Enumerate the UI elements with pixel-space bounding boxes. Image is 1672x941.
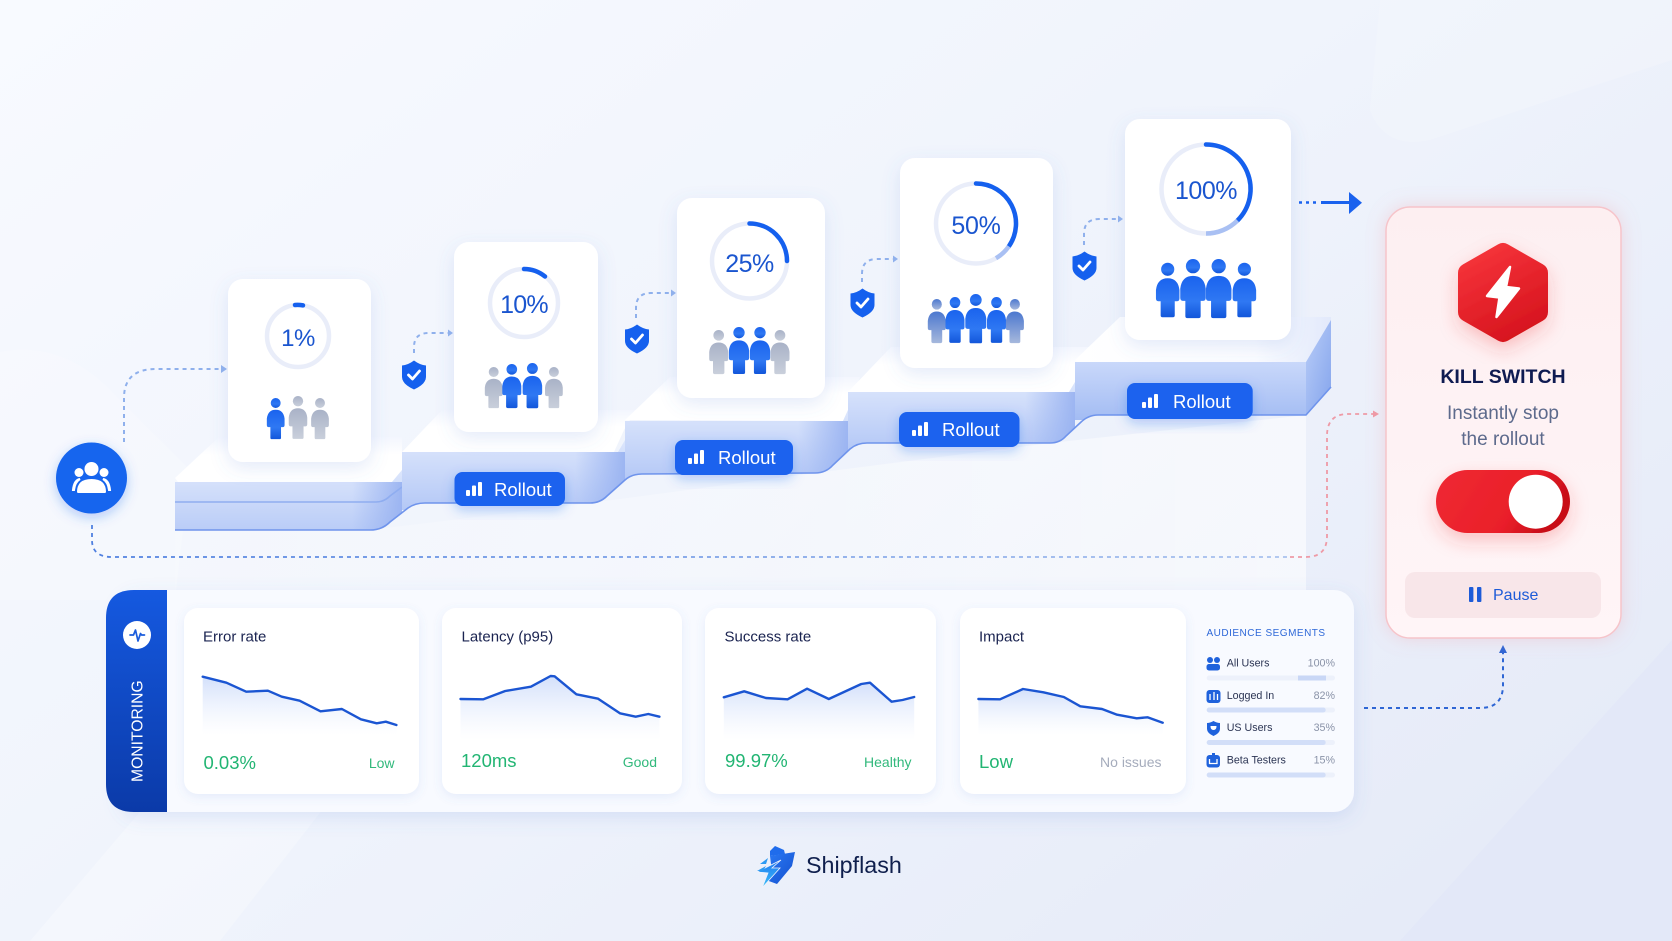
card: 25% (677, 198, 825, 398)
progress ring 100% (1162, 144, 1251, 234)
people: 4 of 4 (1156, 259, 1256, 318)
shield check 4 with connector (1072, 216, 1123, 280)
arrow: audience feedback to kill switch (92, 410, 1379, 557)
metric card: error rate: Error rate (203, 628, 266, 646)
badge: rollout 2: Rollout (494, 479, 552, 500)
arrow: audience to 1% card (124, 369, 222, 442)
staircase platforms (175, 317, 1331, 540)
segment: us users: US Users (1227, 722, 1272, 734)
progress ring 25%: 25% (725, 250, 774, 278)
staircase bottom edge (175, 387, 1331, 530)
card: 50% (900, 158, 1053, 368)
badge: rollout 5: Rollout (1173, 391, 1231, 412)
sparkline: success rate (724, 683, 914, 740)
description: the rollout (1461, 429, 1545, 450)
badge: rollout 4 (899, 412, 1020, 447)
metric card: error rate: 0.03% (204, 752, 256, 773)
sidebar: monitoring: MONITORING (130, 680, 146, 782)
badge: rollout 3 (675, 440, 793, 475)
segment: all users: 100% (1308, 658, 1335, 670)
badge: rollout 4: Rollout (942, 419, 1000, 440)
progress ring 10% (490, 269, 558, 337)
wordmark: Shipflash (806, 852, 902, 878)
arrow: monitoring to kill switch (1364, 645, 1507, 708)
people: 3 of 5 highlighted (928, 294, 1024, 343)
metric card: impact (960, 608, 1186, 794)
people: 1 of 3 (267, 396, 329, 439)
step 1 platform (175, 448, 402, 530)
metric card: latency: Latency (p95) (462, 628, 553, 646)
logo mark (757, 846, 795, 888)
sparkline: latency (460, 676, 659, 740)
segment: logged in: Logged In (1227, 690, 1274, 702)
metric card: impact: Impact (979, 628, 1025, 646)
description: Instantly stop (1447, 403, 1559, 424)
step 2 platform (402, 418, 630, 510)
badge: rollout 2 (454, 472, 565, 506)
progress ring 100%: 100% (1175, 177, 1237, 205)
card: 10% (454, 242, 598, 432)
badge: rollout 3: Rollout (718, 447, 776, 468)
step 5 platform (1075, 317, 1331, 420)
heading: kill switch: KILL SWITCH (1440, 366, 1566, 388)
metric card: latency: 120ms (461, 750, 517, 771)
step 3 platform (625, 377, 860, 480)
metric card: error rate: Low (369, 755, 395, 771)
toggle switch (1436, 470, 1570, 533)
metric card: impact: Low (979, 751, 1014, 772)
progress ring 1%: 1% (281, 325, 315, 352)
segment: all users: All Users (1227, 658, 1269, 670)
metric card: success rate (705, 608, 936, 794)
metric card: latency (442, 608, 682, 794)
logo: shipflash (757, 846, 902, 888)
faint panel under the staircase (175, 415, 1306, 590)
arrowhead: audience to 1% card (221, 365, 227, 373)
metric card: error rate (184, 608, 419, 794)
metric card: success rate: 99.97% (725, 750, 788, 771)
segment: logged in (1206, 690, 1335, 712)
panel: kill switch (1386, 207, 1621, 638)
segment: logged in: 82% (1314, 690, 1335, 702)
card: 100% (1125, 119, 1291, 340)
people: 2 of 4 (709, 327, 790, 374)
progress ring 10%: 10% (500, 291, 548, 319)
card: 1% (228, 279, 371, 462)
metric card: latency: Good (623, 754, 657, 770)
progress ring 25% (712, 224, 787, 298)
metric card: impact: No issues (1100, 754, 1162, 770)
segment: all users (1206, 657, 1335, 680)
button: pause (1405, 572, 1601, 618)
panel: monitoring (106, 590, 1354, 812)
step 4 platform (848, 352, 1082, 450)
segment: beta testers: Beta Testers (1227, 754, 1286, 766)
progress ring 50% (936, 184, 1016, 264)
sparkline: impact (978, 689, 1163, 735)
progress ring 50%: 50% (951, 212, 1001, 240)
segment: beta testers (1206, 753, 1335, 778)
button: pause: Pause (1493, 587, 1538, 604)
shield check 3 with connector (850, 256, 898, 318)
arrow: rollout to kill switch (1299, 192, 1362, 214)
segment: us users (1207, 721, 1335, 745)
sidebar: monitoring (106, 590, 167, 812)
segment: us users: 35% (1314, 722, 1335, 734)
audience segments list (1206, 628, 1335, 778)
shield check 1 with connector (402, 330, 453, 390)
people: 2 of 4 (485, 363, 563, 408)
metric card: success rate: Success rate (724, 628, 811, 646)
icon: red hexagon bolt (1468, 253, 1538, 332)
segment: beta testers: 15% (1314, 754, 1335, 766)
sparkline: error rate (203, 677, 396, 735)
metric card: success rate: Healthy (864, 754, 912, 770)
progress ring 1% (267, 305, 329, 367)
heading: audience segments: AUDIENCE SEGMENTS (1206, 628, 1326, 639)
shield check 2 with connector (625, 290, 676, 354)
icon: audience (56, 442, 127, 514)
badge: rollout 5 (1127, 383, 1253, 419)
